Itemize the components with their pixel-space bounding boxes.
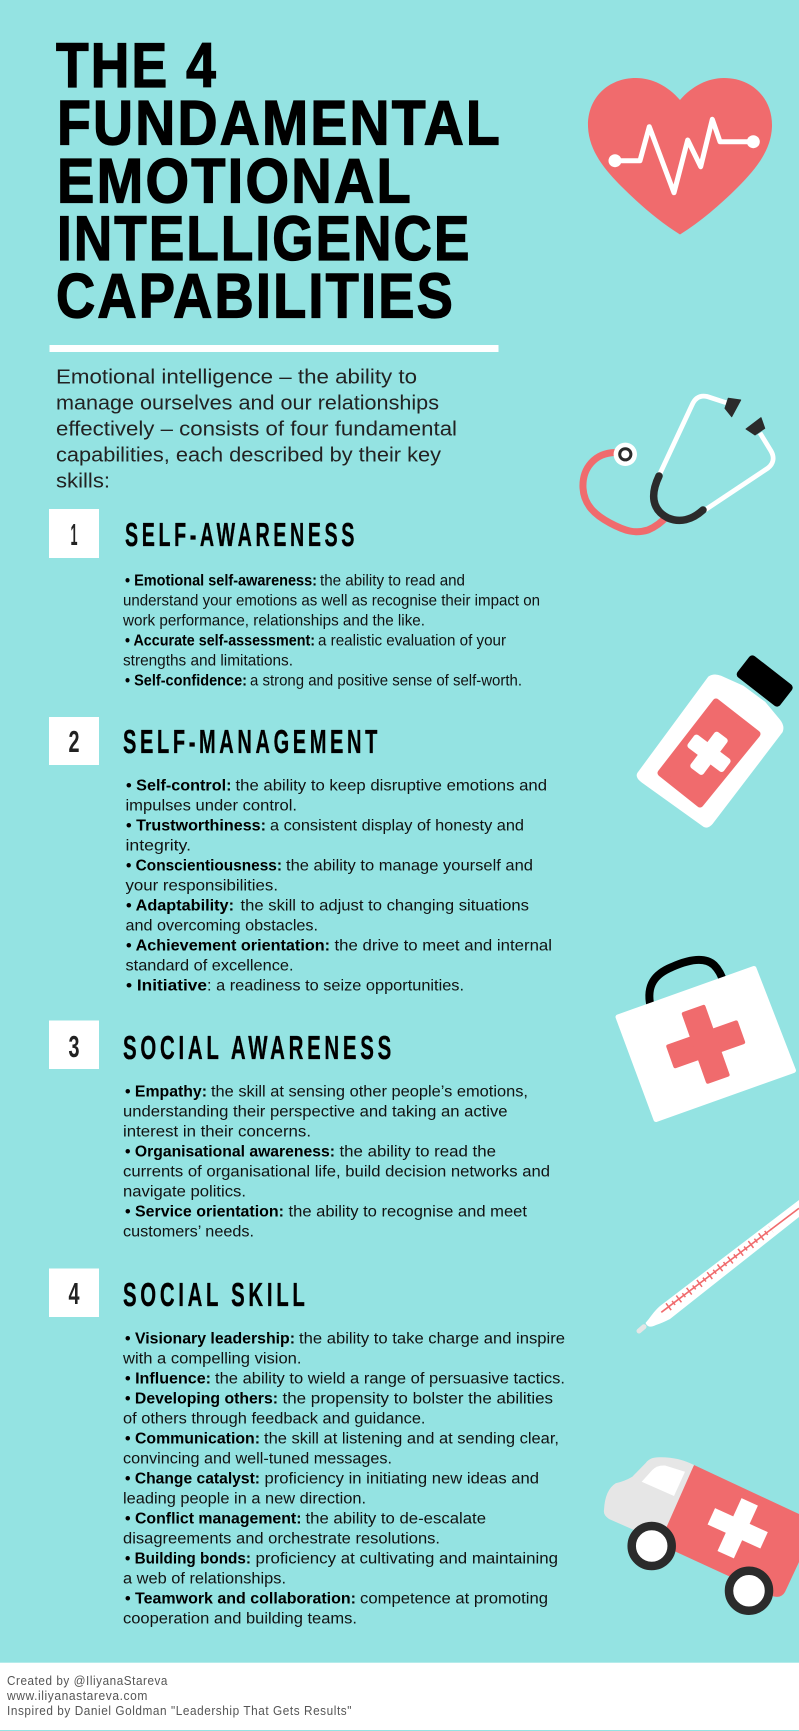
intro text: skills: (56, 470, 110, 492)
number badge 4: 4 (68, 1276, 80, 1311)
text: social skill list: • Building bonds: (125, 1551, 251, 1568)
footer (0, 1663, 799, 1730)
text: social skill list: disagreements and orchestrate resolutions. (123, 1531, 440, 1548)
text: social awareness skills: the ability to read the (340, 1144, 496, 1160)
text: self-awareness skills: a strong and positive sense of self-worth. (250, 673, 522, 690)
text: social skill list: convincing and well-tuned messages. (123, 1451, 392, 1468)
text: self-management skills: • Self-control: (126, 778, 232, 795)
text: social skill list: • Communication: (125, 1431, 260, 1448)
text: social awareness skills: the ability to recognise and meet (288, 1204, 528, 1220)
text: social skill list: with a compelling vision. (122, 1351, 302, 1368)
intro text: manage ourselves and our relationships (56, 392, 439, 414)
footer: Inspired by Daniel Goldman "Leadership That Gets Results" (7, 1704, 352, 1718)
text: social awareness skills: currents of organisational life, build decision networks and (123, 1164, 550, 1180)
text: self-management skills: the drive to meet and internal (334, 938, 552, 955)
text: social skill list: • Developing others: (125, 1391, 278, 1408)
text: self-management skills: • Conscientiousness: (126, 858, 282, 875)
text: social awareness skills: • Organisational awareness: (125, 1144, 335, 1160)
text: self-management skills: the ability to keep disruptive emotions and (236, 778, 547, 795)
title underline (50, 345, 498, 352)
text: self-management skills (126, 778, 552, 995)
title: FUNDAMENTAL (57, 88, 502, 158)
text: social awareness skills: understanding their perspective and taking an active (123, 1104, 507, 1120)
number badge 3: 3 (68, 1029, 80, 1064)
text: self-management skills: the skill to adjust to changing situations (240, 898, 529, 915)
text: self-management skills: your responsibilities. (126, 878, 278, 895)
text: social skill list (122, 1331, 565, 1628)
text: self-management skills: • Achievement orientation: (126, 938, 330, 955)
intro text (56, 366, 457, 492)
number badge 1: 1 (70, 517, 78, 552)
icon: thermometer (639, 1200, 799, 1331)
section 3: social awareness (49, 1020, 550, 1240)
text: self-awareness skills: • Accurate self-assessment: (125, 633, 315, 650)
text: self-management skills: impulses under control. (126, 798, 297, 815)
text: self-management skills: a consistent display of honesty and (270, 818, 524, 835)
number badge 2: 2 (68, 724, 80, 759)
text: self-awareness skills: the ability to read and (320, 573, 465, 590)
number badge 2 (49, 717, 99, 765)
icon: ambulance (604, 1457, 799, 1611)
heading: social skill: SOCIAL SKILL (123, 1276, 308, 1313)
text: social skill list: cooperation and building teams. (123, 1611, 357, 1628)
text: social awareness skills: customers’ needs. (123, 1224, 254, 1240)
text: self-awareness skills: a realistic evaluation of your (318, 633, 507, 650)
title: INTELLIGENCE (57, 204, 472, 274)
section 2: self-management (49, 717, 552, 995)
text: social awareness skills: • Service orientation: (125, 1204, 284, 1220)
icon: first aid kit (618, 960, 794, 1120)
text: social skill list: • Teamwork and collaboration: (125, 1591, 356, 1608)
icon: heart with ECG line (588, 78, 772, 234)
heading: self-awareness: SELF-AWARENESS (125, 516, 358, 553)
text: social skill list: the ability to wield a range of persuasive tactics. (215, 1371, 565, 1388)
icon: medicine bottle (638, 654, 794, 827)
text: social skill list: • Influence: (125, 1371, 211, 1388)
intro text: Emotional intelligence – the ability to (56, 366, 417, 388)
text: self-management skills: : a readiness to seize opportunities. (207, 978, 464, 995)
text: self-management skills: • Trustworthiness: (126, 818, 266, 835)
heading: self-management: SELF-MANAGEMENT (123, 723, 381, 760)
text: self-awareness skills: understand your emotions as well as recognise their impact on (123, 593, 540, 610)
text: social skill list: • Change catalyst: (125, 1471, 260, 1488)
number badge 4 (49, 1268, 99, 1317)
text: self-awareness skills: • Emotional self-awareness: (125, 573, 317, 590)
text: self-awareness skills: strengths and limitations. (123, 653, 293, 670)
text: social skill list: the ability to take charge and inspire (299, 1331, 565, 1348)
section 4: social skill (49, 1268, 565, 1628)
heading: social awareness: SOCIAL AWARENESS (123, 1029, 395, 1066)
text: social awareness skills: the skill at sensing other people’s emotions, (211, 1084, 528, 1100)
text: social skill list: • Visionary leadership: (125, 1331, 295, 1348)
number badge 3 (49, 1020, 99, 1069)
text: social awareness skills: interest in their concerns. (123, 1124, 311, 1140)
icon: stethoscope (583, 396, 773, 532)
text: self-management skills: and overcoming obstacles. (126, 918, 318, 935)
text: self-management skills: standard of excellence. (126, 958, 294, 975)
text: self-management skills: • Adaptability: (126, 898, 234, 915)
footer: www.iliyanastareva.com (6, 1689, 148, 1703)
title: THE 4 (56, 31, 218, 101)
text: social awareness skills (123, 1084, 550, 1240)
text: social skill list: • Conflict management: (125, 1511, 302, 1528)
intro text: capabilities, each described by their key (56, 444, 442, 466)
number badge 1 (49, 509, 99, 558)
text: self-management skills: • Initiative (126, 978, 207, 995)
text: social skill list: the propensity to bolster the abilities (282, 1391, 553, 1408)
section 1: self-awareness (49, 509, 540, 690)
text: social skill list: of others through feedback and guidance. (123, 1411, 426, 1428)
footer: Created by @IliyanaStareva (7, 1674, 168, 1688)
text: social awareness skills: navigate politics. (123, 1184, 246, 1200)
text: social skill list: the skill at listening and at sending clear, (264, 1431, 559, 1448)
text: social skill list: proficiency in initiating new ideas and (264, 1471, 539, 1488)
text: self-awareness skills (122, 573, 540, 690)
title (56, 31, 502, 332)
text: self-awareness skills: work performance, relationships and the like. (122, 613, 425, 630)
text: self-awareness skills: • Self-confidence: (125, 673, 247, 690)
intro text: effectively – consists of four fundamental (56, 418, 457, 440)
text: social skill list: competence at promoting (360, 1591, 548, 1608)
text: self-management skills: integrity. (126, 838, 191, 855)
text: social awareness skills: • Empathy: (125, 1084, 207, 1100)
text: social skill list: a web of relationships. (123, 1571, 286, 1588)
text: social skill list: proficiency at cultivating and maintaining (256, 1551, 558, 1568)
title: CAPABILITIES (56, 262, 455, 332)
text: self-management skills: the ability to manage yourself and (286, 858, 533, 875)
text: social skill list: the ability to de-escalate (306, 1511, 486, 1528)
text: social skill list: leading people in a new direction. (123, 1491, 366, 1508)
title: EMOTIONAL (57, 146, 413, 216)
